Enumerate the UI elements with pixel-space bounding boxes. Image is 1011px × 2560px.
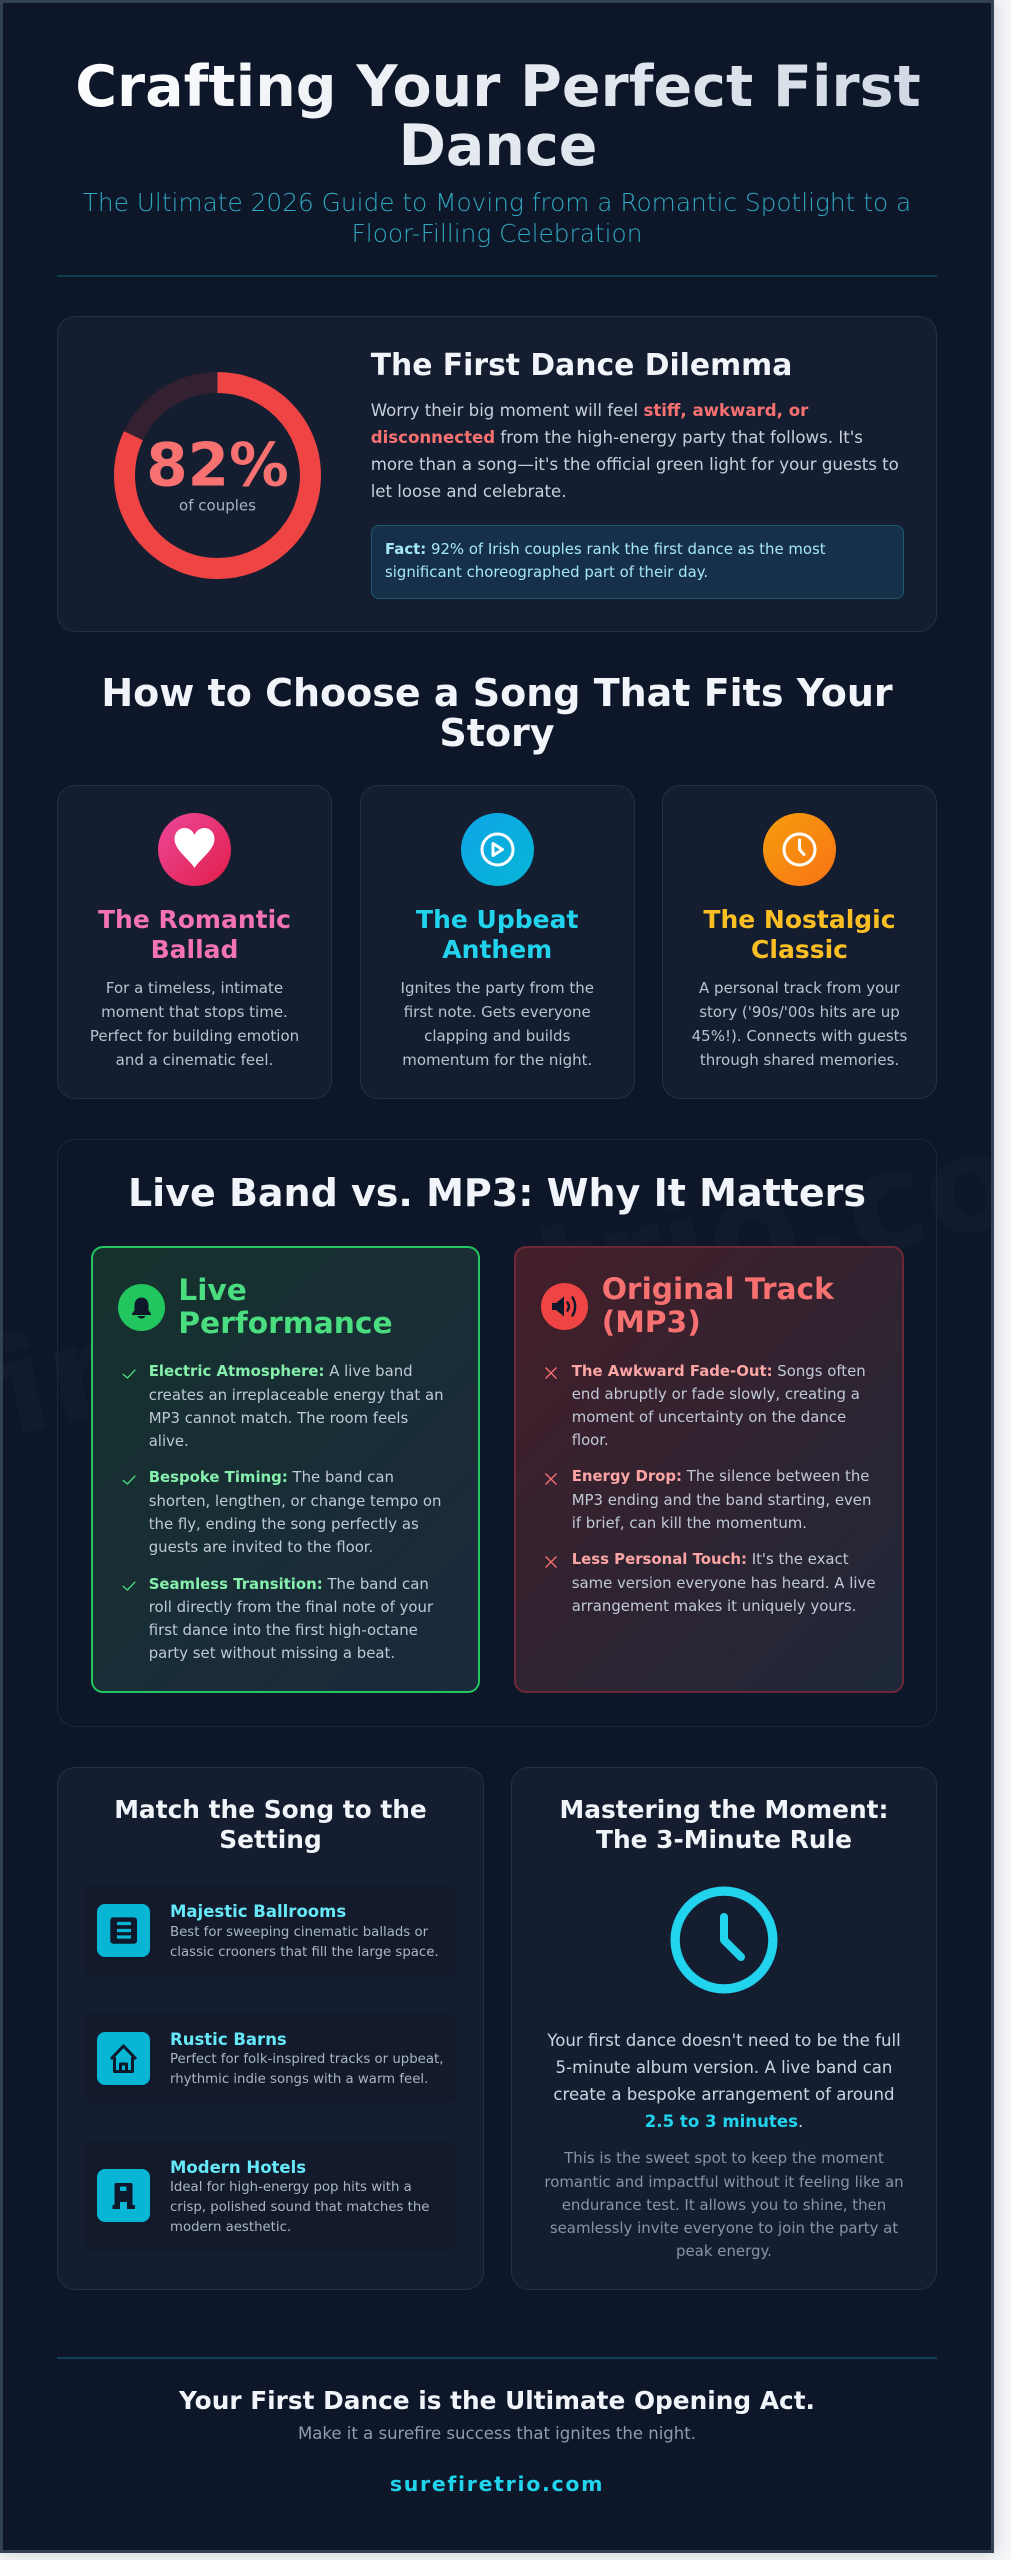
icon: ballroom bbox=[97, 1904, 150, 1957]
card text: first note. Gets everyone bbox=[404, 1003, 591, 1021]
venue title: Majestic Ballrooms bbox=[170, 1902, 346, 1921]
card title bbox=[98, 905, 291, 964]
venue text: classic crooners that fill the large space. bbox=[170, 1945, 439, 1960]
fact text bbox=[385, 540, 826, 581]
section heading: choose a song bbox=[101, 671, 893, 755]
icon: house bbox=[97, 2032, 150, 2085]
icon: play button bbox=[460, 812, 534, 886]
dilemma paragraph: let loose and celebrate. bbox=[371, 482, 566, 501]
item text: creates an irreplaceable energy that an bbox=[149, 1386, 444, 1404]
live performance title bbox=[178, 1273, 393, 1341]
header subtitle: The Ultimate 2026 Guide to Moving from a Romantic Spotlight to a bbox=[83, 188, 911, 217]
item text: Less Personal Touch: It's the exact bbox=[572, 1550, 849, 1568]
header title: Dance bbox=[399, 113, 597, 179]
panel: the 3-minute rule bbox=[511, 1767, 937, 2290]
item text: The Awkward Fade-Out: Songs often bbox=[572, 1362, 866, 1380]
venue text bbox=[170, 2052, 443, 2087]
list item: less personal touch bbox=[545, 1550, 875, 1615]
item text bbox=[572, 1362, 866, 1449]
item text bbox=[572, 1467, 871, 1532]
panel: the upbeat anthem bbox=[360, 785, 635, 1099]
dilemma paragraph bbox=[371, 401, 899, 501]
venue text: crisp, polished sound that matches the bbox=[170, 2200, 429, 2215]
icon: speaker bbox=[541, 1282, 588, 1330]
panel heading: Match the Song to the bbox=[114, 1795, 427, 1824]
dilemma paragraph: Worry their big moment will feel stiff, awkward, or bbox=[371, 401, 808, 420]
item text: if brief, can kill the momentum. bbox=[572, 1514, 807, 1532]
card text: momentum for the night. bbox=[402, 1051, 592, 1069]
icon: clock bbox=[763, 812, 836, 886]
live performance title: Live bbox=[178, 1273, 247, 1308]
panel heading: Live Band vs. MP3: Why It Matters bbox=[128, 1171, 866, 1215]
icon: cross bbox=[545, 1367, 557, 1379]
footer tagline: Make it a surefire success that ignites the night. bbox=[298, 2424, 696, 2443]
donut chart: 82% of couples bbox=[114, 372, 321, 579]
icon: cross bbox=[545, 1473, 557, 1485]
rule text: Your first dance doesn't need to be the full bbox=[547, 2031, 901, 2050]
panel heading: The 3-Minute Rule bbox=[596, 1825, 852, 1854]
list item: bespoke timing bbox=[122, 1468, 441, 1556]
item text: same version everyone has heard. A live bbox=[572, 1574, 875, 1592]
list item: seamless transition bbox=[122, 1575, 434, 1662]
fact text: Fact: 92% of Irish couples rank the first dance as the most bbox=[385, 540, 826, 558]
venue row: modern hotels bbox=[84, 2141, 457, 2250]
header divider bbox=[57, 275, 937, 277]
header subtitle: Floor-Filling Celebration bbox=[352, 219, 642, 248]
panel heading bbox=[560, 1795, 888, 1854]
card title: The Upbeat bbox=[416, 905, 578, 934]
icon: cross bbox=[545, 1556, 557, 1568]
comparison card: original track bbox=[514, 1246, 904, 1693]
item text: moment of uncertainty on the dance bbox=[572, 1408, 846, 1426]
header subtitle bbox=[83, 188, 911, 248]
rule detail text: endurance test. It allows you to shine, then bbox=[562, 2196, 886, 2214]
card text: story ('90s/'00s hits are up bbox=[699, 1003, 900, 1021]
item text: arrangement makes it uniquely yours. bbox=[572, 1597, 856, 1615]
panel: the nostalgic classic bbox=[662, 785, 937, 1099]
item text: party set without missing a beat. bbox=[149, 1644, 395, 1662]
dilemma paragraph: more than a song—it's the official green light for your guests to bbox=[371, 455, 899, 474]
header title bbox=[58, 58, 938, 176]
venue row: majestic ballrooms bbox=[84, 1885, 457, 1976]
item text: Energy Drop: The silence between the bbox=[572, 1467, 869, 1485]
item text: end abruptly or fade slowly, creating a bbox=[572, 1385, 860, 1403]
rule detail text bbox=[544, 2149, 904, 2260]
icon: bell bbox=[118, 1284, 165, 1330]
icon: check bbox=[122, 1581, 136, 1591]
item text: first dance into the first high-octane bbox=[149, 1621, 418, 1639]
panel: live band vs mp3 bbox=[57, 1139, 937, 1727]
rule detail text: This is the sweet spot to keep the moment bbox=[564, 2149, 884, 2167]
item text: Electric Atmosphere: A live band bbox=[149, 1362, 413, 1380]
card text: clapping and builds bbox=[424, 1027, 570, 1045]
card title: Ballad bbox=[151, 935, 238, 964]
venue text: Best for sweeping cinematic ballads or bbox=[170, 1925, 428, 1940]
rule text: 2.5 to 3 minutes. bbox=[645, 2112, 803, 2131]
section heading: choose a song: How to Choose a Song That Fits Your bbox=[101, 671, 893, 715]
rule detail text: seamlessly invite everyone to join the party at bbox=[550, 2219, 898, 2237]
card text: A personal track from your bbox=[699, 979, 900, 997]
donut chart: 82% of couples: 82% bbox=[146, 431, 288, 500]
venue text bbox=[170, 1925, 439, 1960]
card title: The Nostalgic bbox=[703, 905, 896, 934]
item text: Seamless Transition: The band can bbox=[149, 1575, 429, 1593]
icon: check bbox=[122, 1369, 136, 1379]
item text: guests are invited to the floor. bbox=[149, 1538, 373, 1556]
original track title: (MP3) bbox=[602, 1305, 701, 1340]
footer bbox=[57, 2357, 937, 2507]
card title: Anthem bbox=[442, 935, 552, 964]
card title bbox=[416, 905, 578, 964]
venue text: Perfect for folk-inspired tracks or upbeat, bbox=[170, 2052, 443, 2067]
rule detail text: peak energy. bbox=[676, 2242, 772, 2260]
list item: electric atmosphere bbox=[122, 1362, 444, 1450]
item text bbox=[572, 1550, 875, 1615]
donut chart: 82% of couples: of couples bbox=[179, 496, 256, 514]
heading: dilemma: The First Dance Dilemma bbox=[371, 348, 792, 383]
card text bbox=[90, 979, 299, 1069]
venue text: modern aesthetic. bbox=[170, 2220, 291, 2235]
venue row: rustic barns bbox=[84, 2013, 457, 2103]
list item: energy drop bbox=[545, 1467, 871, 1532]
panel: match the song to the setting bbox=[57, 1767, 484, 2290]
card text bbox=[692, 979, 907, 1069]
rule text bbox=[547, 2031, 901, 2131]
card text: For a timeless, intimate bbox=[106, 979, 283, 997]
original track title: Original Track bbox=[602, 1272, 834, 1307]
item text: the fly, ending the song perfectly as bbox=[149, 1515, 419, 1533]
card text: Ignites the party from the bbox=[401, 979, 594, 997]
live performance title: Performance bbox=[178, 1306, 393, 1341]
card text: through shared memories. bbox=[700, 1051, 899, 1069]
item text bbox=[149, 1575, 434, 1662]
original track title bbox=[602, 1272, 834, 1340]
icon: check bbox=[122, 1475, 136, 1485]
venue title: Modern Hotels bbox=[170, 2158, 306, 2177]
list item: awkward fade-out bbox=[545, 1362, 866, 1449]
panel: the romantic ballad bbox=[57, 785, 332, 1099]
rule text: 5-minute album version. A live band can bbox=[556, 2058, 892, 2077]
fact text: significant choreographed part of their day. bbox=[385, 563, 708, 581]
panel: the first dance dilemma bbox=[57, 316, 937, 632]
icon: heart bbox=[158, 812, 231, 886]
footer link: surefiretrio.com bbox=[390, 2472, 604, 2496]
rule detail text: romantic and impactful without it feeling like an bbox=[544, 2172, 904, 2190]
venue text bbox=[170, 2180, 429, 2235]
venue text: Ideal for high-energy pop hits with a bbox=[170, 2180, 412, 2195]
card title bbox=[703, 905, 896, 964]
card title: The Romantic bbox=[98, 905, 291, 934]
icon: hotel bbox=[97, 2169, 150, 2222]
item text: MP3 ending and the band starting, even bbox=[572, 1490, 871, 1508]
card text: 45%!). Connects with guests bbox=[692, 1027, 907, 1045]
rule text: create a bespoke arrangement of around bbox=[553, 2085, 895, 2104]
card text: moment that stops time. bbox=[101, 1003, 288, 1021]
panel heading bbox=[114, 1795, 427, 1854]
dilemma paragraph: disconnected from the high-energy party that follows. It's bbox=[371, 428, 863, 447]
item text: MP3 cannot match. The room feels bbox=[149, 1409, 408, 1427]
comparison card: live performance bbox=[91, 1246, 480, 1693]
item text: floor. bbox=[572, 1431, 609, 1449]
icon: large clock bbox=[670, 1886, 778, 1994]
card text bbox=[401, 979, 594, 1069]
footer divider bbox=[57, 2357, 937, 2358]
venue title: Rustic Barns bbox=[170, 2030, 287, 2049]
callout: fact bbox=[371, 524, 904, 599]
item text bbox=[149, 1362, 444, 1450]
card text: Perfect for building emotion bbox=[90, 1027, 299, 1045]
card text: and a cinematic feel. bbox=[116, 1051, 273, 1069]
header title: Crafting Your Perfect First bbox=[75, 54, 921, 120]
panel heading: Setting bbox=[219, 1825, 322, 1854]
footer headline: Your First Dance is the Ultimate Opening Act. bbox=[179, 2386, 815, 2415]
item text: shorten, lengthen, or change tempo on bbox=[149, 1492, 441, 1510]
item text: alive. bbox=[149, 1432, 189, 1450]
item text: roll directly from the final note of your bbox=[149, 1598, 433, 1616]
item text bbox=[149, 1468, 441, 1556]
panel heading: Mastering the Moment: bbox=[560, 1795, 888, 1824]
card title: Classic bbox=[751, 935, 848, 964]
section heading: choose a song: Story bbox=[439, 711, 555, 755]
item text: Bespoke Timing: The band can bbox=[149, 1468, 394, 1486]
venue text: rhythmic indie songs with a warm feel. bbox=[170, 2072, 428, 2087]
